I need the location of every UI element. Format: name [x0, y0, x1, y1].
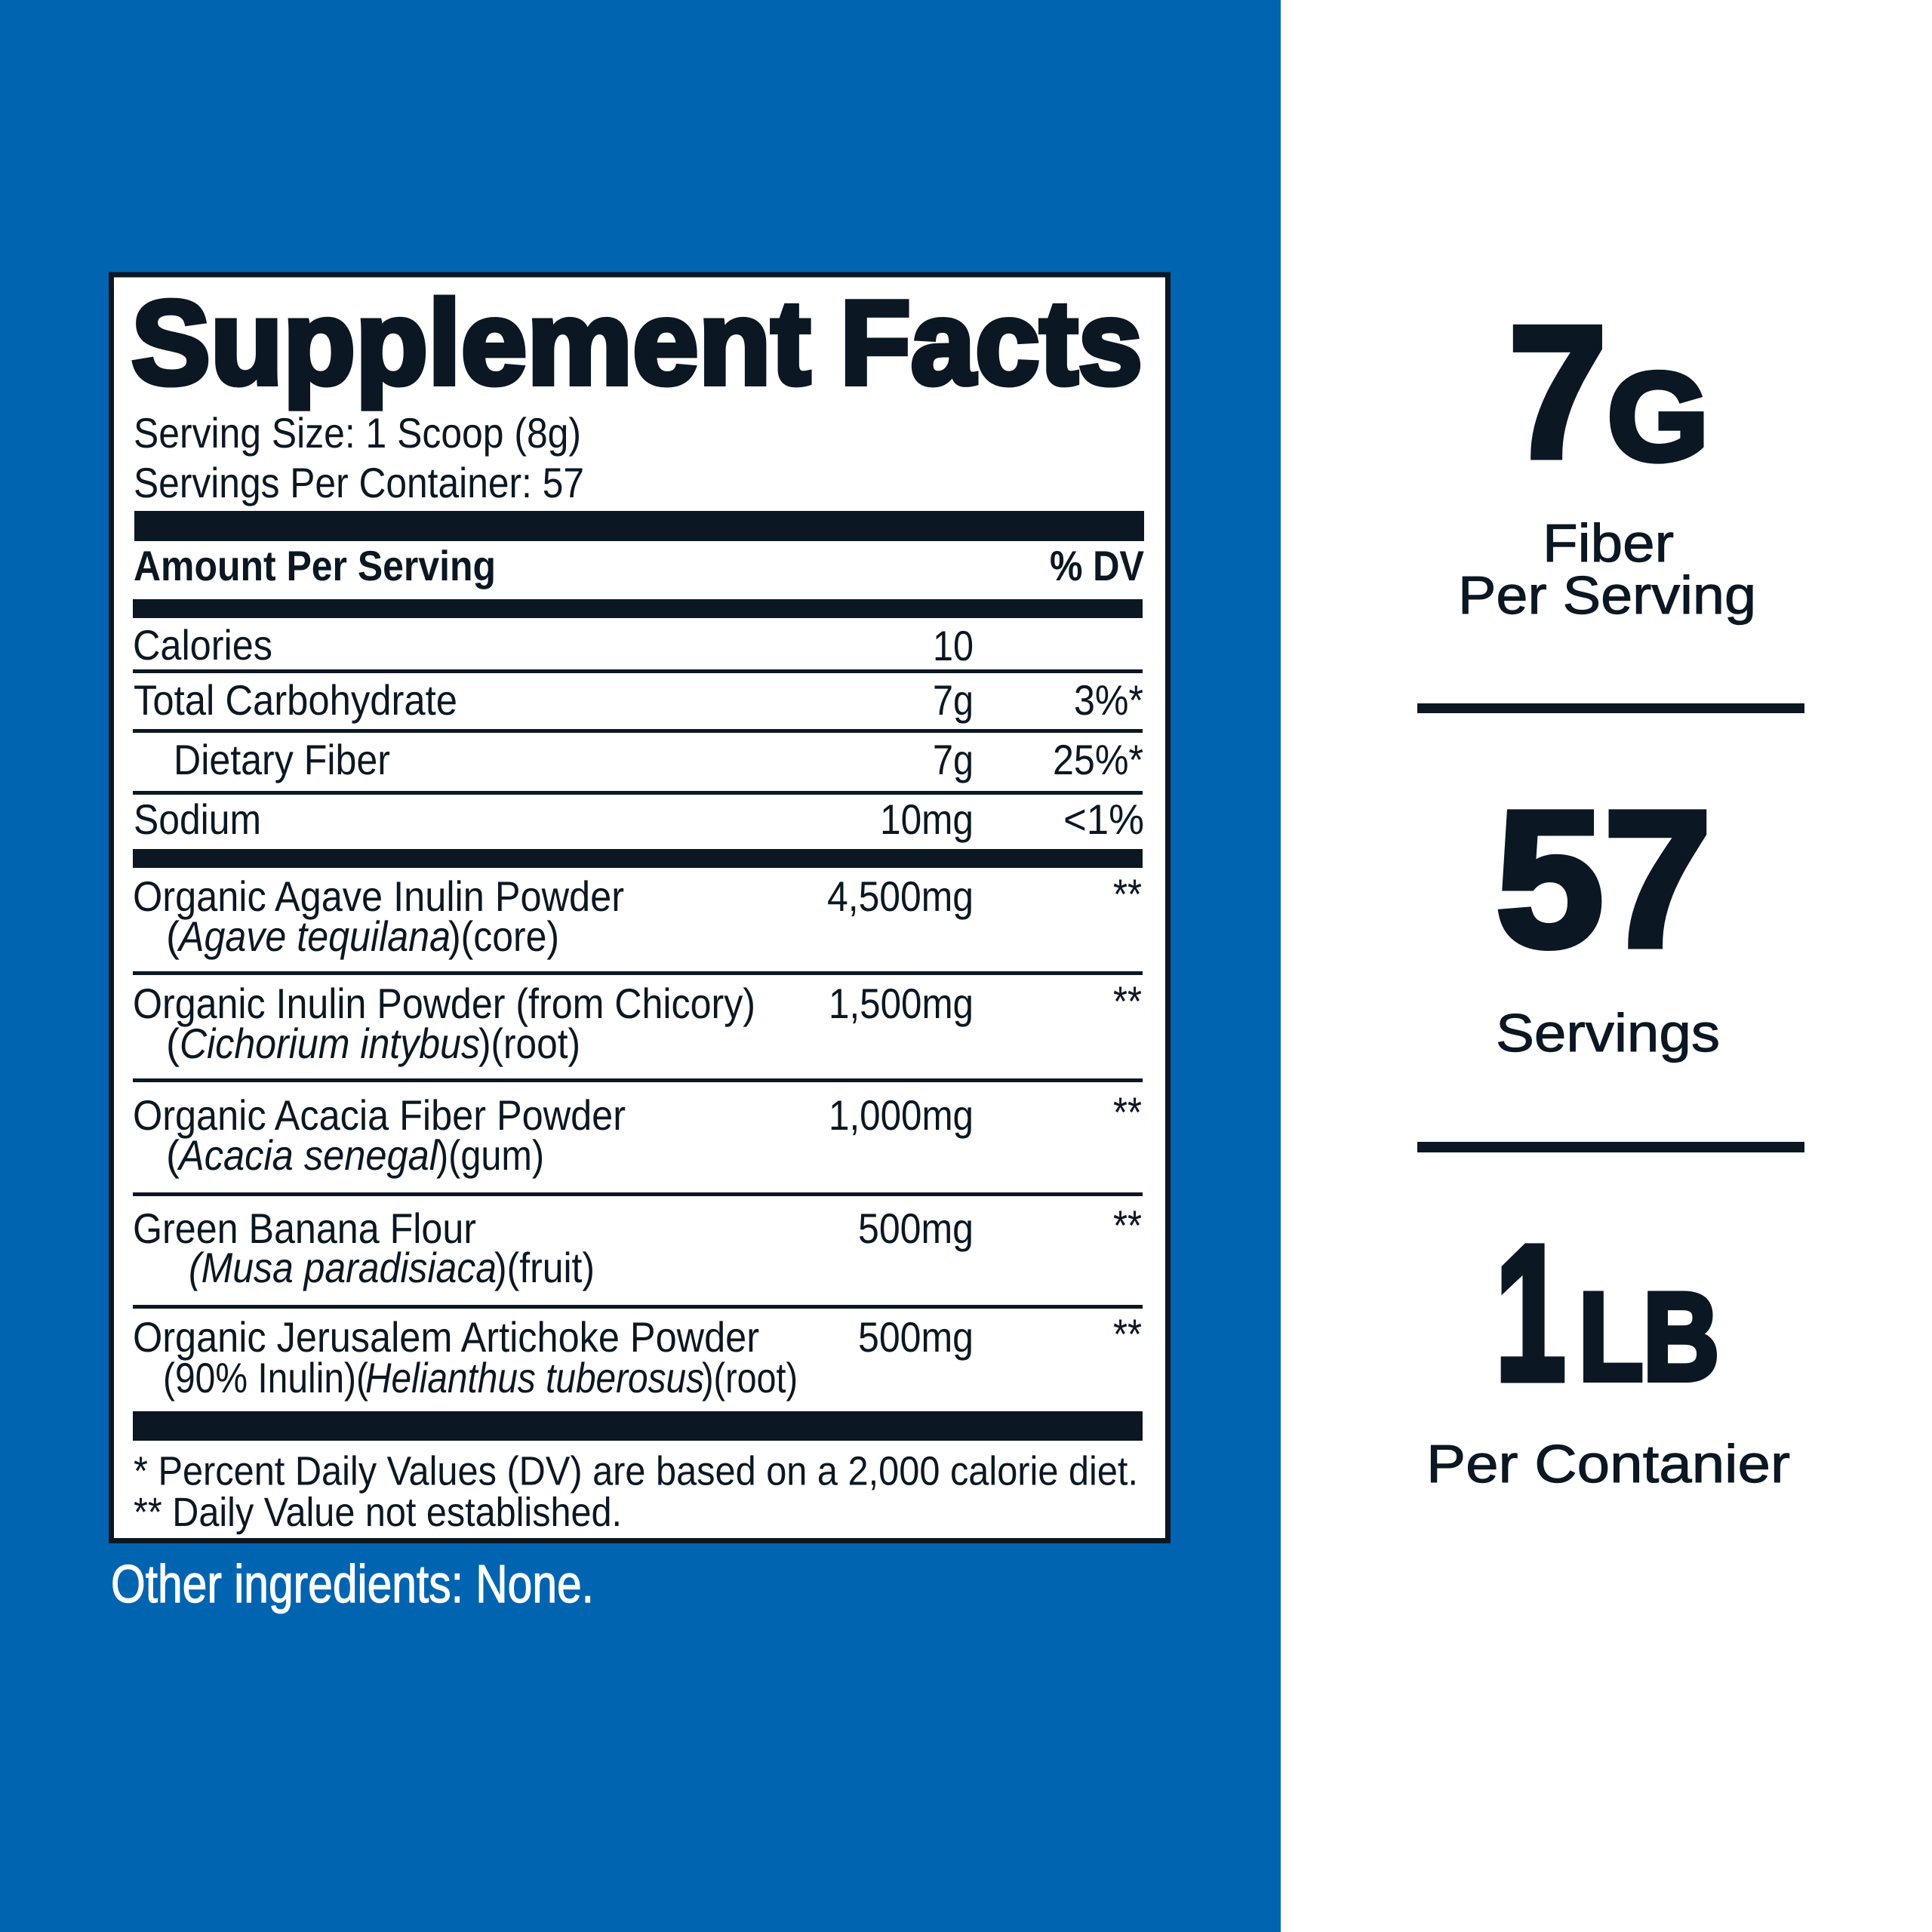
row: organic acacia fiber powder: Acacia senegal — [177, 1131, 438, 1179]
row: green banana flour: )(fruit) — [494, 1244, 595, 1291]
column header: amount per serving: Amount Per Serving — [134, 542, 496, 589]
label frame — [112, 275, 1168, 1541]
title — [131, 276, 1143, 409]
row: sodium: <1% — [1063, 795, 1144, 843]
row: organic inulin powder: )(root) — [478, 1020, 580, 1067]
footnote: percent daily values: * Percent Daily Values (DV) are based on a 2,000 calorie diet. — [134, 1449, 1138, 1494]
row: organic inulin powder: Cichorium intybus — [180, 1020, 480, 1067]
stat: 7g fiber per serving — [1458, 287, 1756, 626]
row: dietary fiber: Dietary Fiber — [174, 736, 390, 783]
stat: 57 servings: 57 — [1496, 771, 1712, 987]
stat: 1 lb per container — [1426, 1205, 1790, 1494]
row: organic jerusalem artichoke powder: Organic Jerusalem Artichoke Powder — [133, 1313, 759, 1361]
serving size: Serving Size: 1 Scoop (8g) — [134, 409, 581, 457]
row: organic agave inulin powder: Organic Agave Inulin Powder — [133, 872, 624, 920]
row: green banana flour: ** — [1113, 1201, 1142, 1249]
panel: supplement facts label — [112, 275, 1168, 1541]
bottom thick bar — [133, 1411, 1143, 1441]
row: calories — [133, 621, 974, 669]
stat: 7g fiber per serving: 7 — [1509, 287, 1607, 497]
row: organic inulin powder: ** — [1113, 977, 1142, 1025]
title: Supplement — [131, 276, 811, 409]
row: organic agave inulin powder: ** — [1113, 870, 1142, 918]
row: organic acacia fiber powder: ** — [1113, 1088, 1142, 1136]
row: organic acacia fiber powder: )(gum) — [436, 1131, 544, 1179]
row: dietary fiber: 25%* — [1053, 736, 1143, 783]
row: sodium: 10mg — [880, 795, 974, 843]
stat: 1 lb per container: LB — [1579, 1267, 1719, 1406]
title: Facts — [840, 276, 1143, 409]
row: organic agave inulin powder: Agave tequilana — [177, 912, 451, 960]
row: green banana flour: (Musa paradisiaca — [189, 1244, 497, 1291]
row: total carbohydrate: 3%* — [1074, 676, 1143, 724]
row: organic agave inulin powder: )(core) — [448, 912, 559, 960]
stat: 1 lb per container: Per Contanier — [1426, 1435, 1790, 1494]
row: organic jerusalem artichoke powder: 500mg — [858, 1313, 974, 1361]
row: green banana flour: Green Banana Flour — [133, 1204, 476, 1252]
top thick bar — [134, 511, 1144, 541]
divider — [1417, 1142, 1804, 1152]
row: green banana flour — [133, 1201, 1142, 1291]
row: organic acacia fiber powder — [133, 1088, 1142, 1179]
row: calories: Calories — [133, 621, 272, 669]
footnote: daily value not established: ** Daily Value not established. — [134, 1490, 622, 1535]
row: organic acacia fiber powder: 1,000mg — [829, 1091, 974, 1139]
column header: percent DV: % DV — [1050, 542, 1144, 589]
third thick bar — [133, 849, 1143, 868]
row: organic inulin powder — [133, 977, 1142, 1067]
row: total carbohydrate: Total Carbohydrate — [134, 676, 457, 724]
row: green banana flour: 500mg — [858, 1204, 974, 1252]
row: organic jerusalem artichoke powder: Helianthus tuberosus — [365, 1354, 704, 1401]
other ingredients note: Other ingredients: None. — [111, 1555, 594, 1614]
row: organic jerusalem artichoke powder: ** — [1113, 1310, 1142, 1358]
row: organic inulin powder: 1,500mg — [829, 980, 974, 1027]
servings per container: Servings Per Container: 57 — [134, 459, 584, 506]
row: organic jerusalem artichoke powder: (90% Inulin)( — [163, 1354, 368, 1401]
row: total carbohydrate — [134, 676, 1143, 724]
blue background panel — [0, 0, 1281, 1932]
stat: 7g fiber per serving: G — [1607, 347, 1709, 486]
row: organic acacia fiber powder: ( — [166, 1131, 180, 1179]
second thick bar — [133, 599, 1143, 618]
stat: 1 lb per container: 1 — [1495, 1205, 1566, 1421]
row: organic acacia fiber powder: Organic Acacia Fiber Powder — [133, 1091, 626, 1139]
row: sodium: Sodium — [134, 795, 261, 843]
stat: 7g fiber per serving: Fiber — [1543, 514, 1674, 574]
row: organic inulin powder: Organic Inulin Powder (from Chicory) — [133, 980, 755, 1027]
row: organic jerusalem artichoke powder: )(root) — [702, 1354, 798, 1401]
stat: 57 servings: Servings — [1496, 1004, 1720, 1063]
row: calories: 10 — [933, 622, 974, 669]
row: dietary fiber — [174, 736, 1143, 783]
stat: 7g fiber per serving: Per Serving — [1458, 566, 1756, 626]
row: organic agave inulin powder — [133, 870, 1142, 960]
row: dietary fiber: 7g — [933, 736, 974, 783]
row: organic inulin powder: ( — [166, 1020, 180, 1067]
row: total carbohydrate: 7g — [933, 676, 974, 724]
row: organic jerusalem artichoke powder — [133, 1310, 1142, 1401]
row: sodium — [134, 795, 1144, 843]
row: organic agave inulin powder: 4,500mg — [827, 872, 974, 920]
divider — [1417, 703, 1804, 713]
row: organic agave inulin powder: ( — [166, 912, 180, 960]
